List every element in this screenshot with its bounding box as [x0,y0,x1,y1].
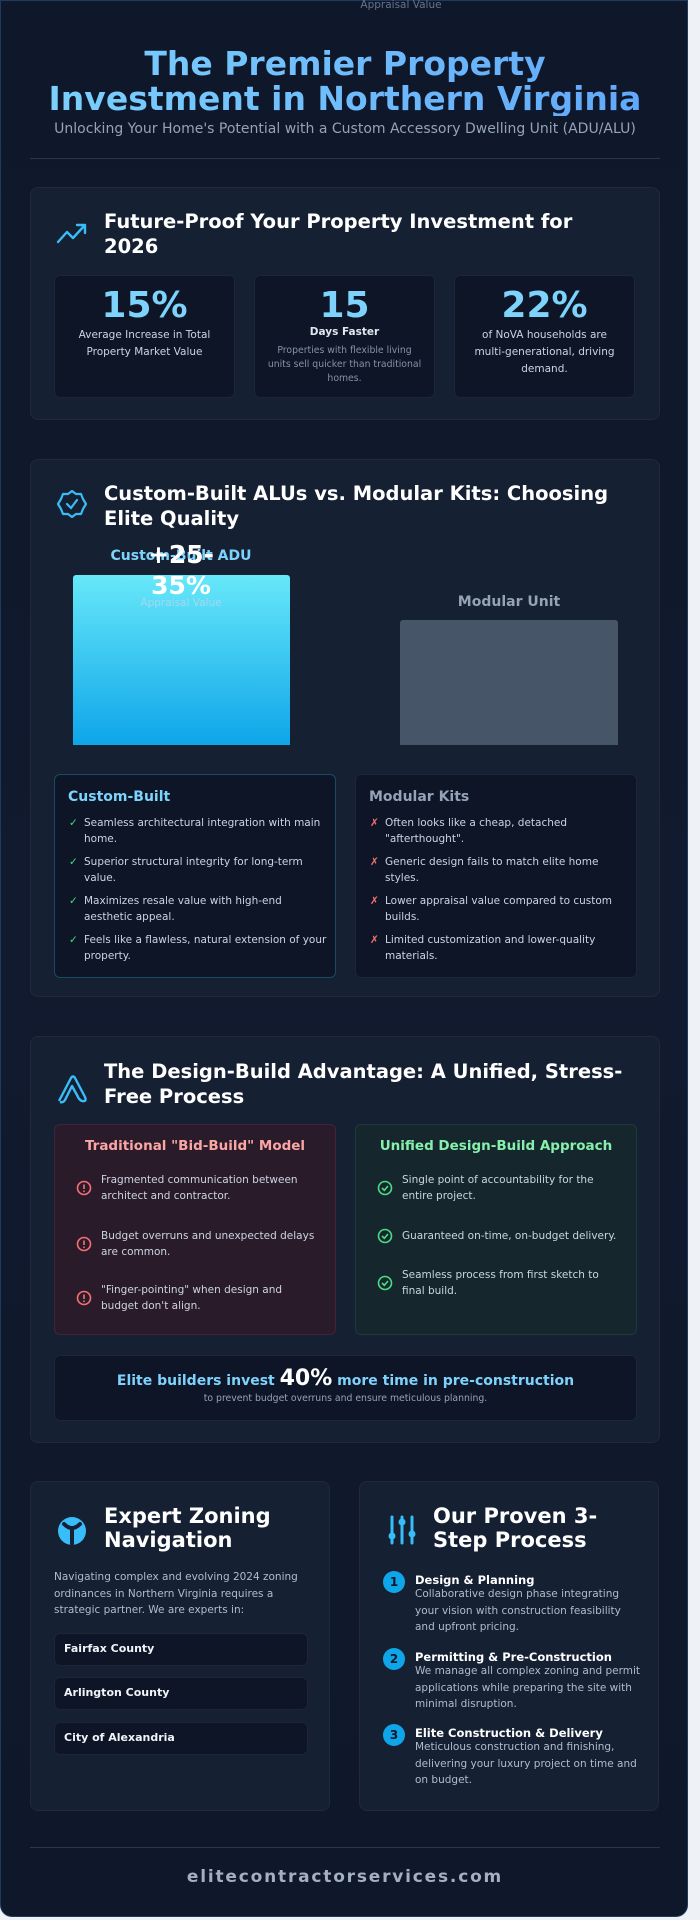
subtitle: Unlocking Your Home's Potential with a Custom Accessory Dwelling Unit (ADU/ALU) [54,121,636,137]
heading: 2026 [104,235,158,258]
list: custom-built [54,774,336,978]
panel: custom vs modular [30,459,660,997]
stat 2: homes. [327,373,362,384]
paragraph: Navigating complex and evolving 2024 zoning [54,1571,298,1583]
list: custom-built: Seamless architectural integration with main [84,817,320,829]
list: modular kits [355,774,637,978]
stat 2: units sell quicker than traditional [268,359,421,370]
panel: future-proof stats [30,187,660,420]
box: traditional: "Finger-pointing" when design and [101,1284,282,1296]
stat 3: demand. [521,363,568,375]
step 2: minimal disruption. [415,1698,517,1710]
step 1: your vision with construction feasibility [415,1604,621,1616]
list: modular kits: ✗ [370,856,379,868]
step 1 [383,1571,621,1633]
bar chart: +25- [148,540,214,569]
step 1: Design & Planning [415,1573,534,1587]
step 3: 3 [390,1728,398,1742]
stat 2: Days Faster [310,326,379,338]
heading: The Design-Build Advantage: A Unified, Stress- [104,1060,622,1083]
stat 2: 15 [319,285,370,326]
paragraph: ordinances in Northern Virginia requires a [54,1588,273,1600]
box: unified: entire project. [402,1190,476,1202]
list: custom-built: Superior structural integrity for long-term [84,856,303,868]
paragraph: strategic partner. We are experts in: [54,1604,244,1616]
list: custom-built: Custom-Built [68,789,170,805]
list: custom-built: aesthetic appeal. [84,911,175,923]
box: traditional: budget don't align. [101,1300,201,1312]
panel: 3-step process [359,1481,659,1811]
box: unified: Seamless process from first sketch to [402,1269,599,1281]
heading [104,1504,271,1552]
list: custom-built: ✓ [69,895,78,907]
title [1,46,689,116]
list: modular kits: "afterthought". [385,833,464,845]
list: modular kits: materials. [385,950,438,962]
callout: 40% [54,1355,637,1421]
bar: modular [400,620,618,745]
bar chart: 35% [151,571,211,600]
step 1: Collaborative design phase integrating [415,1588,619,1600]
list: custom-built: ✓ [69,856,78,868]
heading: Navigation [104,1528,232,1552]
panel: design-build advantage [30,1036,660,1443]
heading: Step Process [433,1528,587,1552]
heading: Our Proven 3- [433,1504,597,1528]
callout: 40%: Elite builders invest 40% more time in pre-construction [117,1366,574,1391]
stat 2: Properties with flexible living [277,345,412,356]
step 2: 2 [390,1652,398,1666]
box: unified: Unified Design-Build Approach [380,1138,612,1154]
heading: Expert Zoning [104,1504,271,1528]
box: unified: final build. [402,1285,457,1297]
box: unified: Guaranteed on-time, on-budget delivery. [402,1230,616,1242]
list: modular kits: ✗ [370,934,379,946]
callout: 40%: to prevent budget overruns and ensure meticulous planning. [204,1393,487,1404]
list: modular kits: Lower appraisal value compared to custom [385,895,612,907]
list: modular kits: builds. [385,911,420,923]
list: modular kits: ✗ [370,895,379,907]
icon: trend arrow [56,224,86,244]
stat 1 [54,275,235,398]
heading [104,482,608,530]
heading: Elite Quality [104,507,239,530]
county list: Arlington County [64,1686,169,1699]
stat 1: 15% [101,285,188,326]
box: traditional: Budget overruns and unexpected delays [101,1230,314,1242]
panel: zoning [30,1481,330,1811]
heading [433,1504,597,1552]
stat 3: 22% [501,285,588,326]
list: custom-built: value. [84,872,116,884]
step 3: delivering your luxury project on time and [415,1758,637,1770]
step 2: We manage all complex zoning and permit [415,1665,640,1677]
list: modular kits: Generic design fails to match elite home [385,856,598,868]
box: traditional: architect and contractor. [101,1190,230,1202]
bar: custom [73,575,290,745]
list: modular kits: ✗ [370,817,379,829]
list: custom-built: ✓ [69,817,78,829]
bar chart: Custom-Built ADU [111,548,251,564]
list: modular kits: Limited customization and lower-quality [385,934,595,946]
step 1: 1 [390,1575,398,1589]
list: custom-built: Maximizes resale value with high-end [84,895,282,907]
stat 1: Property Market Value [86,346,203,358]
list: modular kits: Often looks like a cheap, detached [385,817,567,829]
paragraph [54,1571,298,1616]
list: custom-built: property. [84,950,131,962]
bar chart [73,540,618,745]
box: traditional [54,1124,336,1335]
list: modular kits: styles. [385,872,419,884]
heading: Future-Proof Your Property Investment for [104,210,572,233]
heading [104,1060,622,1108]
county list: City of Alexandria [64,1731,175,1744]
title: The Premier Property [144,44,546,83]
list: modular kits: Modular Kits [369,789,469,805]
list: custom-built: Feels like a flawless, natural extension of your [84,934,326,946]
step 2: applications while preparing the site with [415,1682,632,1694]
heading: Free Process [104,1085,244,1108]
stat 3: multi-generational, driving [474,346,615,358]
stat 3: of NoVA households are [482,329,607,341]
box: traditional: Traditional "Bid-Build" Model [85,1138,305,1154]
box: traditional: Fragmented communication between [101,1174,298,1186]
icon: sliders [388,1516,416,1544]
icon: zoning [58,1517,86,1545]
list: custom-built: ✓ [69,934,78,946]
box: traditional: are common. [101,1246,170,1258]
stat 2 [254,275,435,398]
heading [104,210,572,258]
step 2 [383,1648,640,1710]
box: unified: Single point of accountability for the [402,1174,594,1186]
stat 3 [454,275,635,398]
icon: badge check [56,490,88,518]
list: custom-built: home. [84,833,117,845]
step 2: Permitting & Pre-Construction [415,1650,612,1664]
stat 1: Average Increase in Total [79,329,210,341]
icon: compass [58,1075,87,1104]
step 3: on budget. [415,1774,472,1786]
heading: Custom-Built ALUs vs. Modular Kits: Choosing [104,482,608,505]
box: unified [355,1124,637,1335]
title: Investment in Northern Virginia [49,79,641,118]
county list [55,1634,307,1754]
county list: Fairfax County [64,1642,154,1655]
footer: elitecontractorservices.com [187,1867,503,1887]
bar chart: Modular Unit [458,594,560,610]
step 3: Elite Construction & Delivery [415,1726,603,1740]
bar chart: Appraisal Value [140,597,222,609]
step 3: Meticulous construction and finishing, [415,1741,614,1753]
step 3 [383,1724,637,1786]
step 1: and upfront pricing. [415,1621,519,1633]
